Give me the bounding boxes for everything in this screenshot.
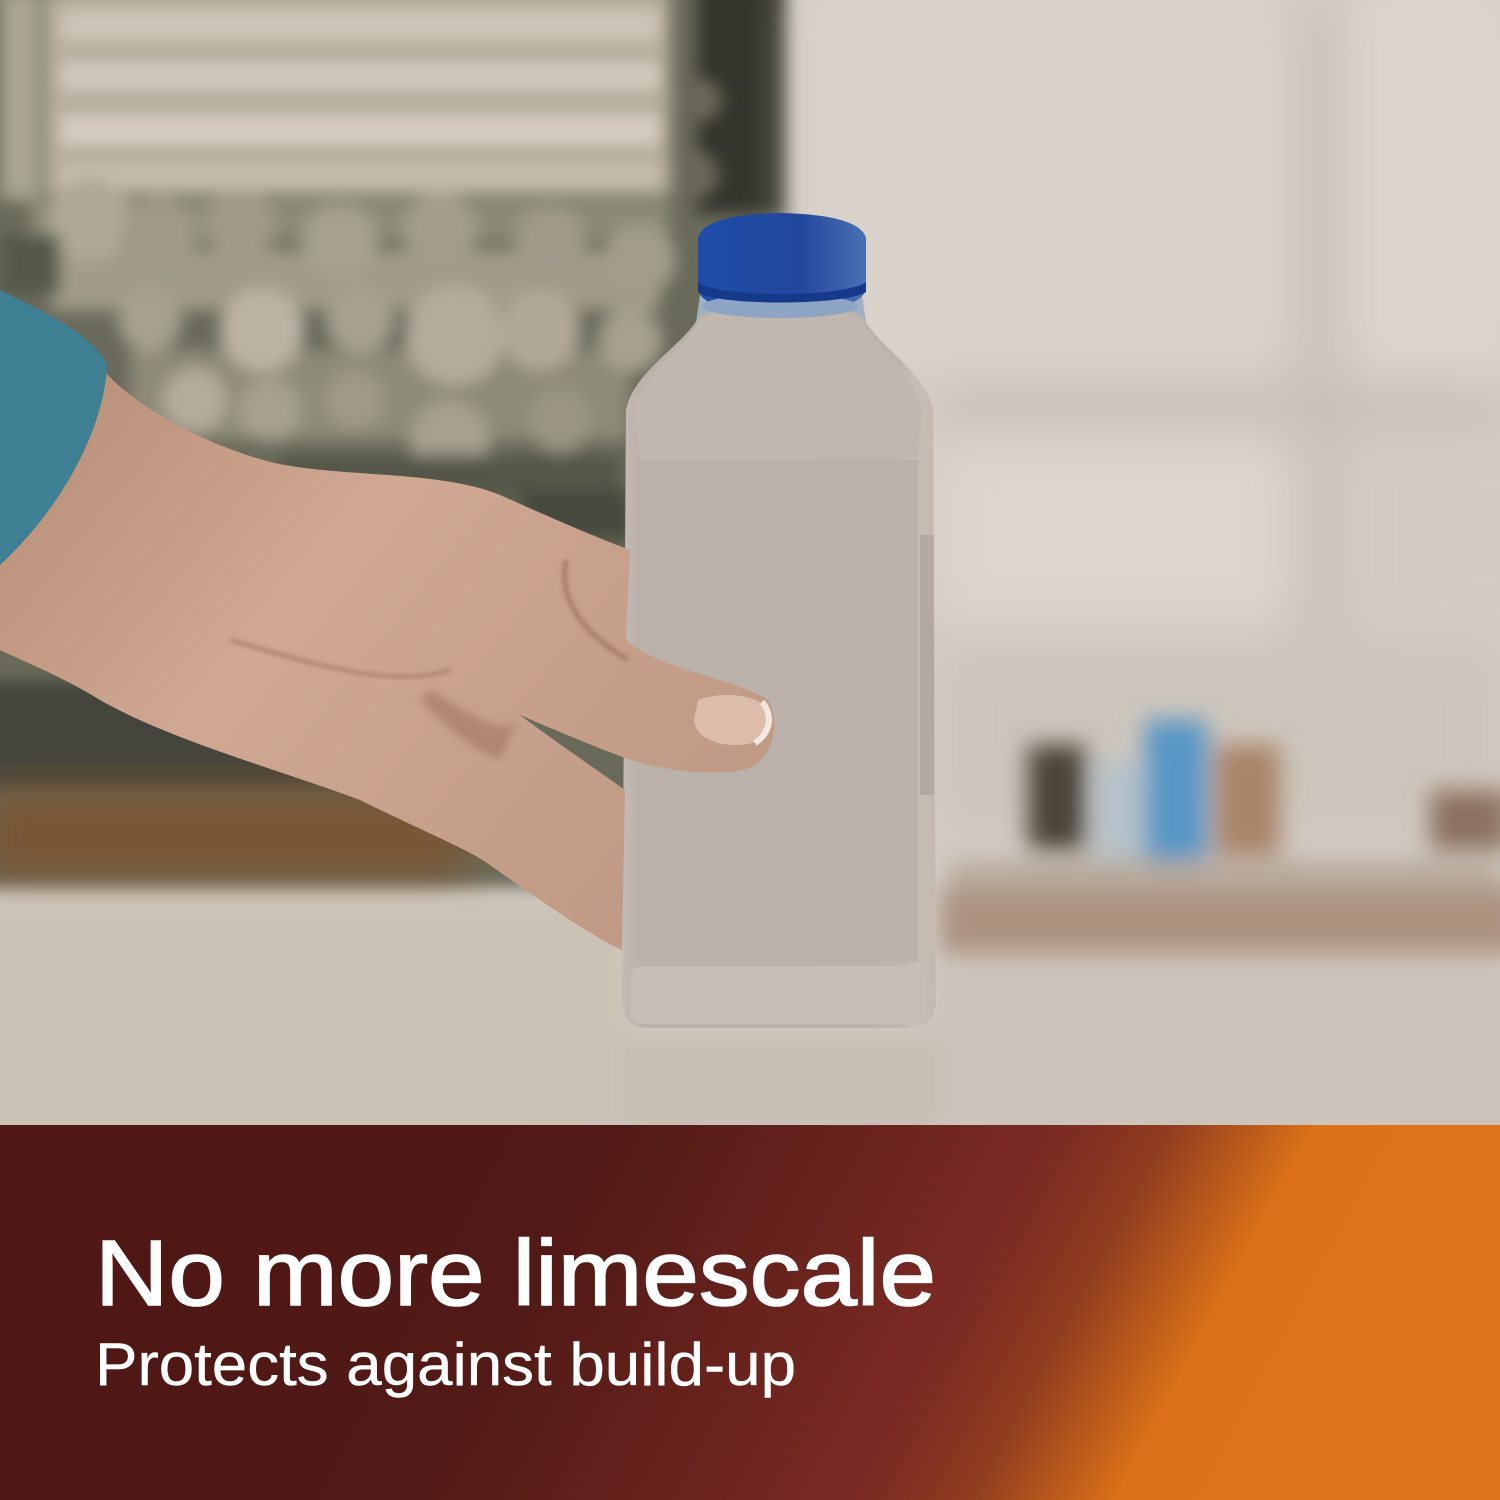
blurred warm glow under the hand: [0, 790, 470, 880]
blurred bright glass bokeh: [0, 0, 722, 540]
window panes on the right: [800, 0, 1500, 830]
label recess: [640, 460, 918, 962]
subtitle: Protects against build-up: [95, 1331, 796, 1398]
banner: [0, 1125, 1500, 1500]
nail tip: [755, 702, 769, 743]
bottle neck: [696, 295, 866, 322]
bottle foot: [630, 966, 924, 1024]
thumbnail: [694, 695, 772, 745]
illustration: hand: [0, 372, 774, 950]
shoulder highlight: [634, 310, 922, 458]
bottle shoulder and body: [622, 308, 936, 1028]
thumb crease: [564, 560, 628, 660]
wooden shelf with objects: [940, 720, 1500, 955]
hand shape: [0, 372, 774, 950]
thumb shadow: [420, 690, 520, 760]
title: No more limescale: [95, 1221, 936, 1325]
palm crease: [230, 640, 450, 677]
kitchen counter: [0, 895, 1500, 1145]
illustration: sleeve: [0, 290, 107, 565]
dark shelf area: [0, 0, 790, 890]
illustration: bottle: [622, 213, 936, 1028]
photo background: [0, 0, 1500, 1145]
bottle cap: [698, 213, 866, 318]
ribbed edge: [920, 535, 934, 795]
